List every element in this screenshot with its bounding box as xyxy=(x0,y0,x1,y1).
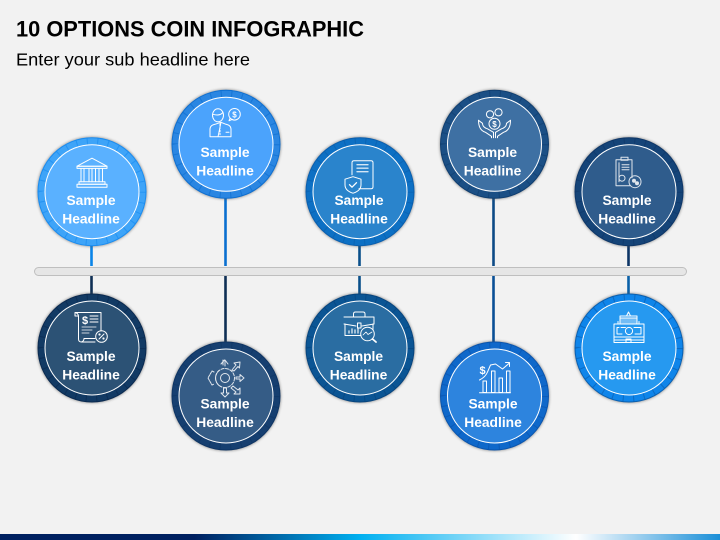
label: Sample xyxy=(468,145,517,160)
label xyxy=(62,349,120,382)
label: Headline xyxy=(62,368,120,382)
coin 2: advisor xyxy=(171,89,281,199)
horizontal timeline bar xyxy=(34,268,686,276)
label xyxy=(464,396,522,430)
label: Headline xyxy=(464,163,522,178)
icon: growth chart with dollar: $ xyxy=(479,365,486,377)
label: Headline xyxy=(598,212,656,227)
label: Sample xyxy=(66,349,116,364)
label: Headline xyxy=(330,368,388,382)
label: Sample xyxy=(468,396,518,412)
icon: briefcase with magnifier xyxy=(344,312,376,342)
coin 4: hands with coins xyxy=(440,89,550,199)
icon: invoice scroll with percent: $ xyxy=(82,315,88,327)
footer gradient bar xyxy=(0,534,720,540)
coin 9: growth chart xyxy=(440,341,550,451)
label xyxy=(464,145,522,178)
icon: bank xyxy=(77,158,107,187)
title: 10 OPTIONS COIN INFOGRAPHIC xyxy=(16,16,364,42)
label: Sample xyxy=(334,349,383,364)
label xyxy=(196,396,254,430)
icon: gears with arrows xyxy=(208,360,244,397)
label: Sample xyxy=(200,145,250,160)
coin 1: bank xyxy=(37,137,147,247)
label: Headline xyxy=(196,415,254,430)
coin 3: document shield xyxy=(305,137,415,247)
label: Headline xyxy=(62,212,120,227)
icon: hands holding coins: $ xyxy=(492,120,497,129)
label: Sample xyxy=(66,193,116,208)
label: Sample xyxy=(602,193,652,208)
label: Headline xyxy=(330,212,388,227)
subtitle: Enter your sub headline here xyxy=(16,50,250,70)
coin 5: clipboard xyxy=(574,137,684,247)
icon: clipboard with coins xyxy=(616,157,641,188)
label: Sample xyxy=(602,349,652,364)
icon: money stack xyxy=(614,312,644,342)
label xyxy=(330,193,388,227)
coin 6: invoice scroll xyxy=(37,293,147,403)
icon: document with shield xyxy=(345,161,373,193)
coin 10: money stack xyxy=(574,293,684,403)
icon: advisor with dollar bubble: $ xyxy=(232,110,237,119)
label xyxy=(196,145,254,178)
label: Headline xyxy=(598,368,656,382)
label xyxy=(598,193,656,227)
label: Headline xyxy=(464,415,522,430)
coin 7: gears and arrows xyxy=(171,341,281,451)
label xyxy=(62,193,120,227)
label: Headline xyxy=(196,163,254,178)
label xyxy=(598,349,656,382)
label xyxy=(330,349,388,382)
label: Sample xyxy=(334,193,384,208)
connector lines xyxy=(92,196,628,344)
label: Sample xyxy=(200,396,250,412)
coin 8: briefcase analytics xyxy=(305,293,415,403)
